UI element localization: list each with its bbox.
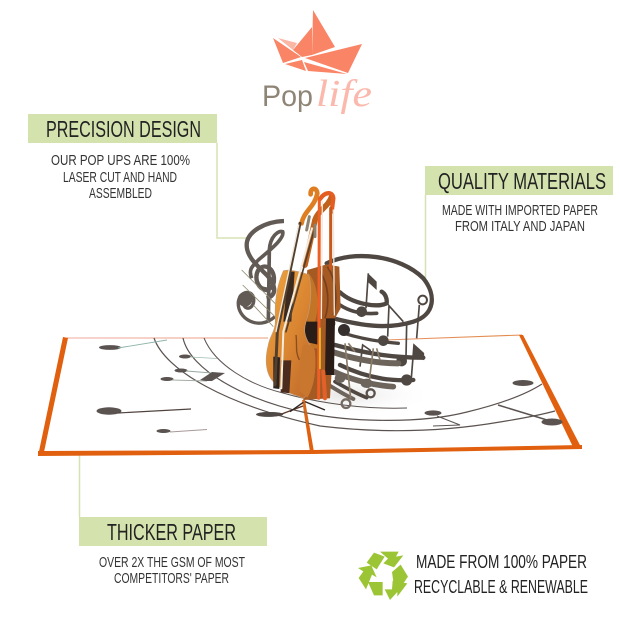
panel: precision design <box>28 114 217 202</box>
text block: thicker paper <box>99 555 245 587</box>
panel: quality materials <box>425 166 613 235</box>
pop-up card <box>38 335 582 456</box>
connector lines <box>80 143 426 517</box>
violin back body <box>300 264 341 400</box>
text block: quality materials: FROM ITALY AND JAPAN <box>455 219 585 235</box>
soft shadow <box>255 373 435 417</box>
text block: precision design: ASSEMBLED <box>89 186 152 202</box>
logo: Poplife <box>262 10 372 115</box>
fingerboards <box>273 357 280 389</box>
music notes <box>325 273 427 386</box>
text block: recycling claim <box>414 551 588 597</box>
treble clef <box>238 221 284 327</box>
right-panel notes <box>424 380 562 426</box>
icon: recycling symbol <box>358 552 408 600</box>
bows and strings <box>275 200 334 398</box>
heading: thicker paper: THICKER PAPER <box>107 519 236 545</box>
card slit tab <box>304 400 307 425</box>
text block: precision design: LASER CUT AND HAND <box>63 170 177 186</box>
text block: thicker paper: OVER 2X THE GSM OF MOST <box>99 555 245 571</box>
heading: precision design: PRECISION DESIGN <box>46 116 201 142</box>
text block: thicker paper: COMPETITORS' PAPER <box>114 571 229 587</box>
logo word: life: life <box>316 73 372 115</box>
text block: precision design: OUR POP UPS ARE 100% <box>51 153 190 169</box>
card top edges <box>64 335 522 340</box>
left-panel notes <box>96 340 303 433</box>
staff arcs <box>154 338 555 431</box>
text block: quality materials <box>442 203 598 235</box>
violin necks and scrolls <box>302 189 333 265</box>
logo word: Pop: Pop <box>262 80 313 113</box>
panel: thicker paper <box>79 517 267 587</box>
text block: precision design <box>51 153 190 202</box>
icon: origami boat <box>273 10 362 74</box>
front notes with ring heads <box>335 343 380 408</box>
pop-up violin and music <box>238 189 432 425</box>
card sheet <box>39 335 581 456</box>
card orange frame <box>38 335 582 456</box>
back music ribbons <box>327 256 432 398</box>
violin front body <box>266 270 314 398</box>
front music ribbons <box>326 350 398 399</box>
